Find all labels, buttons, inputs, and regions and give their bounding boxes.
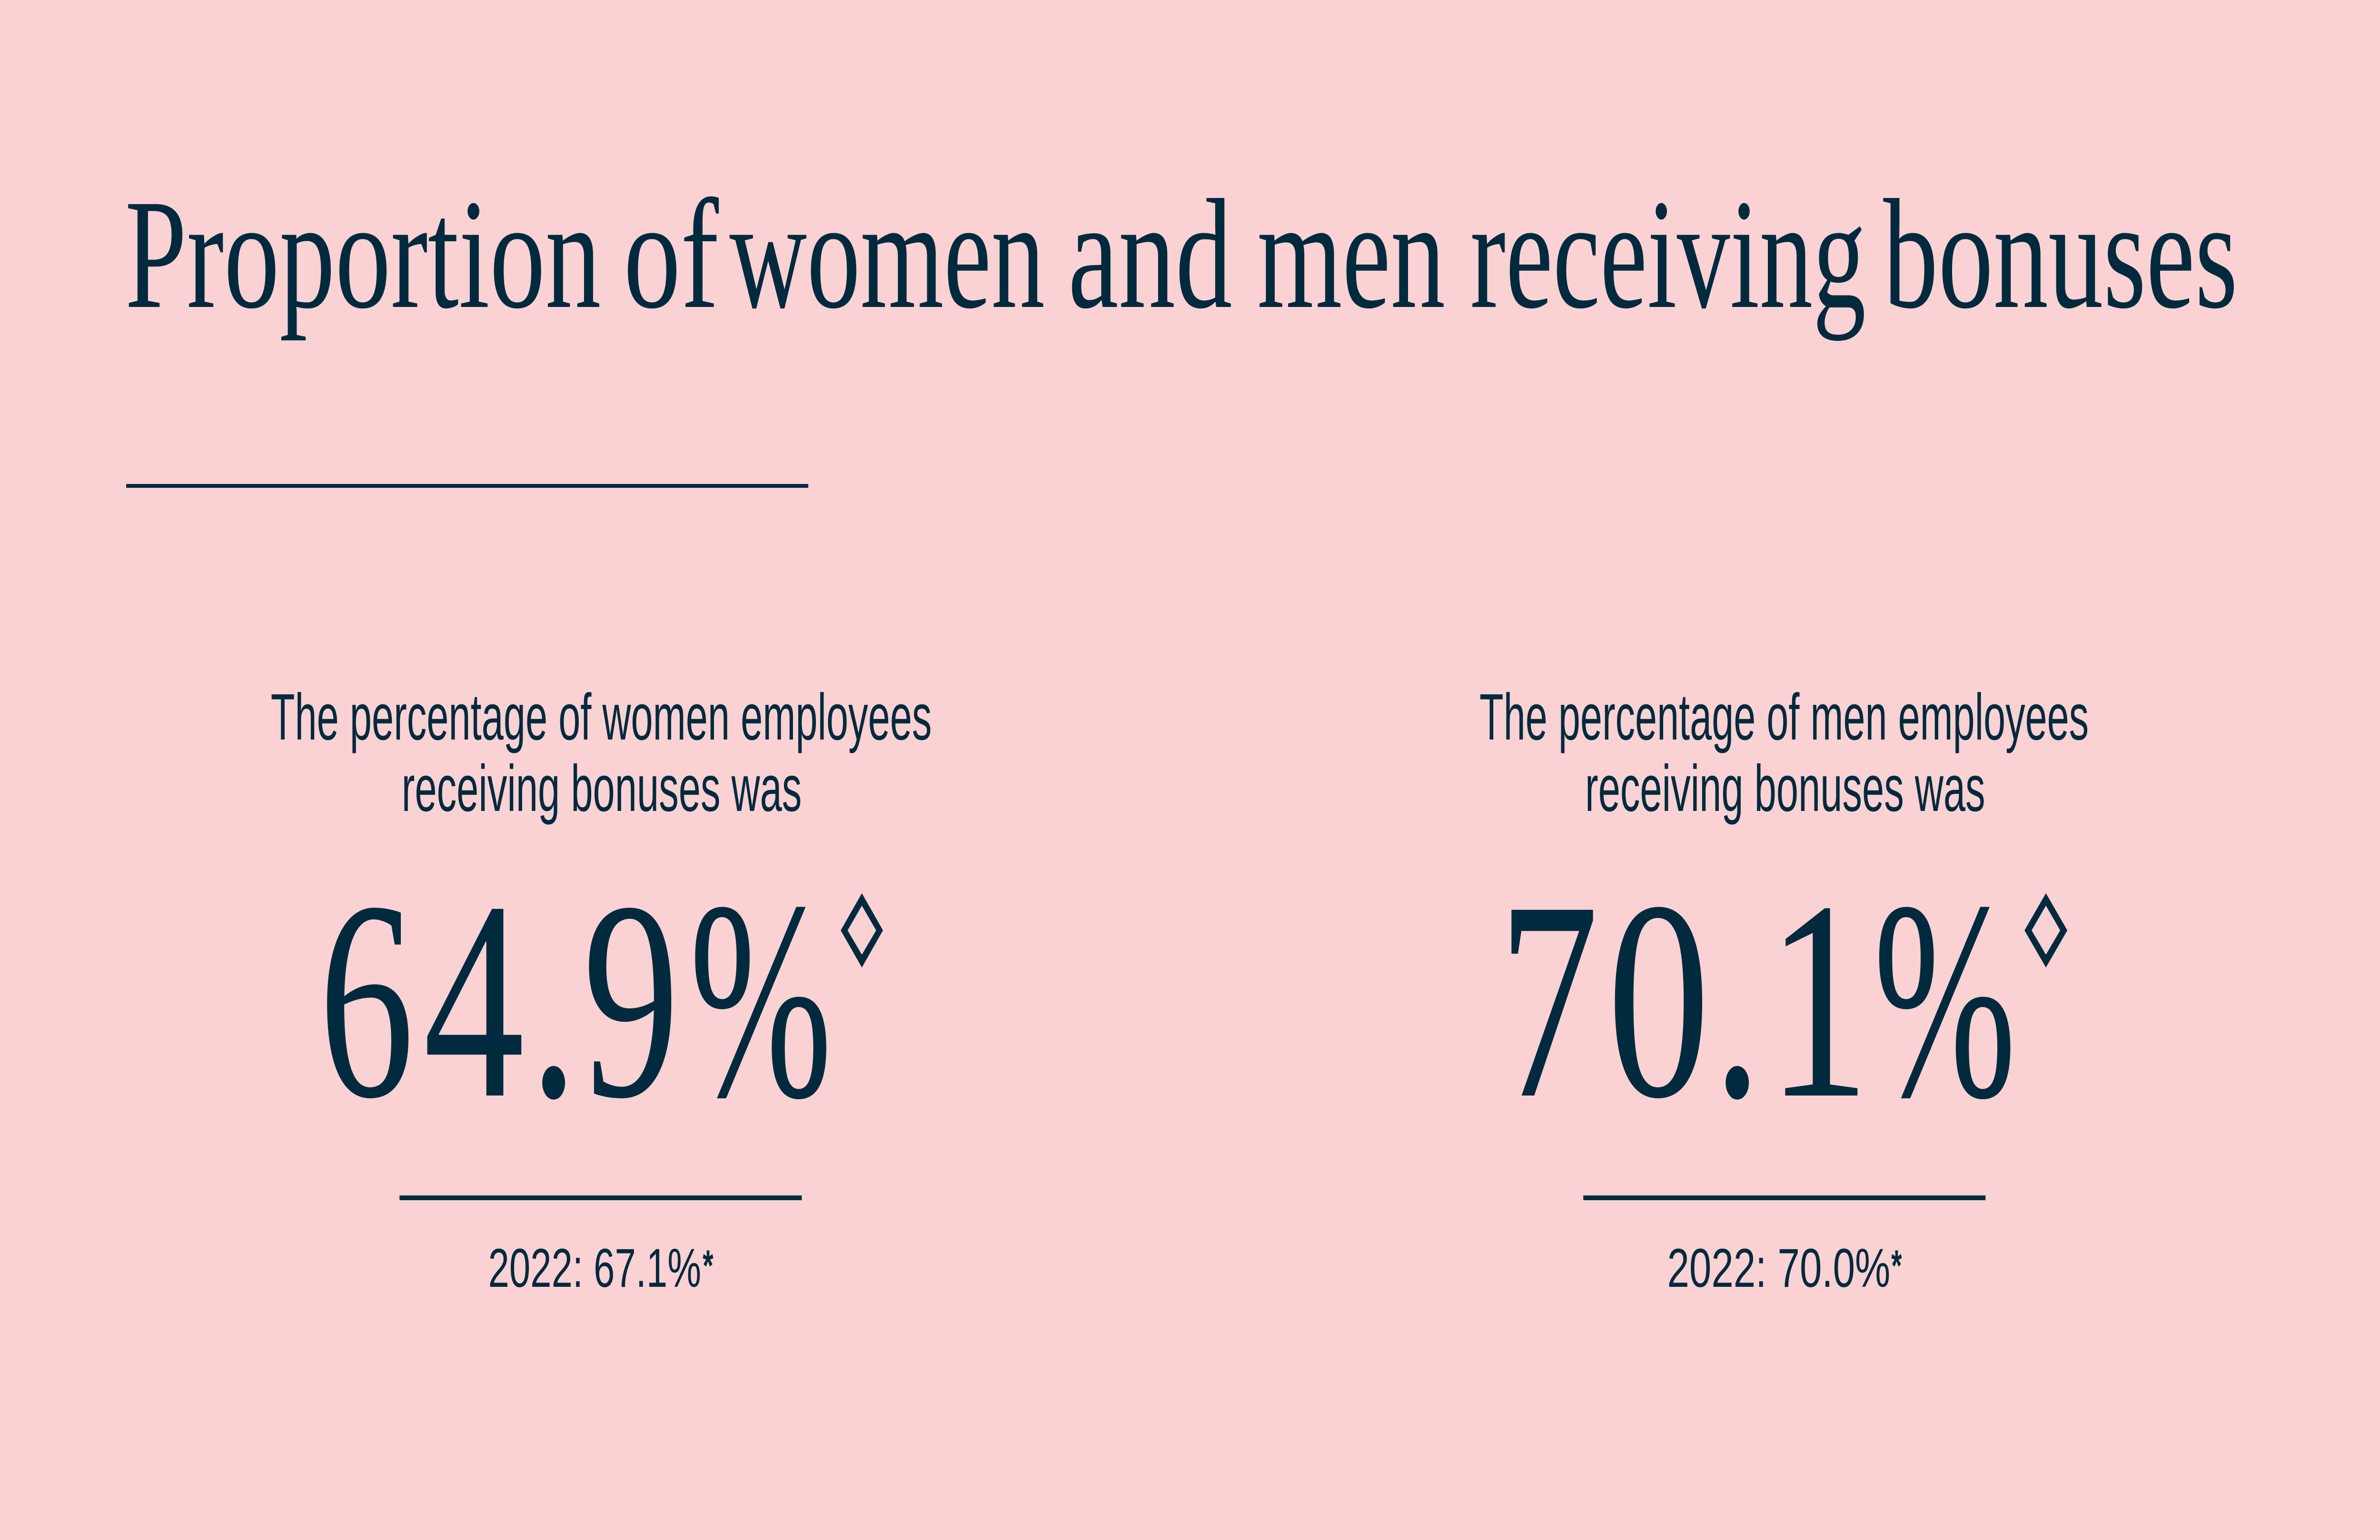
title: receiving	[1470, 167, 1866, 341]
women description: The percentage of women employees	[271, 681, 932, 754]
title: bonuses	[1883, 167, 2238, 341]
title: and	[1068, 167, 1232, 341]
title: men	[1257, 167, 1445, 341]
men description	[1479, 681, 2089, 825]
panel: men	[1479, 681, 2089, 1299]
women percentage value: 9	[583, 843, 679, 1157]
women percentage value	[319, 843, 832, 1157]
title: of	[624, 167, 720, 341]
panel: women	[271, 681, 932, 1299]
men description: The percentage of men employees	[1479, 681, 2089, 754]
men percentage value: %	[1874, 843, 2016, 1157]
women percentage value: .	[529, 843, 578, 1157]
men percentage value: 7	[1498, 843, 1599, 1157]
women 2022 comparison: *	[703, 1242, 714, 1290]
men percentage value	[1498, 843, 2016, 1157]
men rule	[1583, 1195, 1985, 1200]
men description: receiving bonuses was	[1585, 752, 1985, 825]
title: Proportion	[125, 167, 601, 341]
men percentage value: .	[1713, 843, 1762, 1157]
men percentage value: 1	[1767, 843, 1870, 1157]
women 2022 comparison: 2022: 67.1%	[488, 1238, 701, 1299]
icon: diamond footnote marker	[841, 893, 883, 967]
women description	[271, 681, 932, 825]
title	[125, 167, 2238, 341]
icon: diamond footnote marker	[2024, 893, 2067, 967]
women percentage value: 4	[423, 843, 525, 1157]
title: women	[729, 167, 1045, 341]
men percentage value: 0	[1607, 843, 1710, 1157]
men 2022 comparison: 2022: 70.0%	[1667, 1238, 1890, 1299]
women description: receiving bonuses was	[402, 752, 802, 825]
women rule	[399, 1195, 802, 1200]
title rule	[126, 484, 808, 488]
men 2022 comparison: *	[1891, 1242, 1902, 1290]
women percentage value: %	[689, 843, 832, 1157]
women percentage value: 6	[319, 843, 414, 1157]
